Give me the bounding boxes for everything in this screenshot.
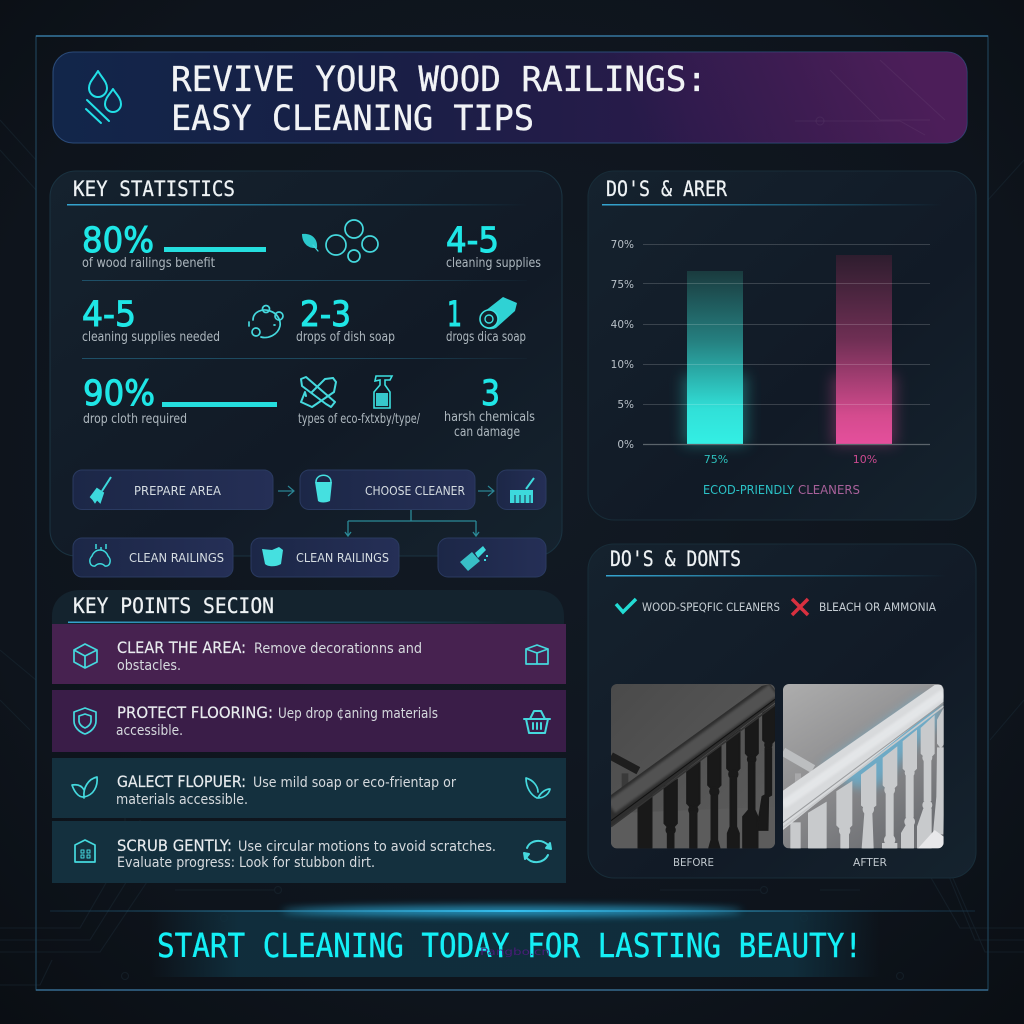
call to action: START CLEANING TODAY FOR LASTING BEAUTY! <box>157 926 862 965</box>
icon: cube <box>74 644 97 668</box>
icon: shield <box>74 708 96 734</box>
step: clean railings 1 <box>73 538 233 577</box>
label: before: BEFORE <box>673 856 714 869</box>
row: select flower: Use mild soap or eco-frientap or <box>253 775 456 791</box>
step: brush <box>497 470 546 510</box>
photo: before <box>611 684 775 848</box>
connector arrows <box>345 510 479 536</box>
bar chart: 10% <box>611 359 634 371</box>
row: select flower <box>52 758 566 818</box>
stat: 4-5 cleaning supplies: 4-5 <box>446 221 499 261</box>
stat: 4-5 supplies needed <box>82 295 220 345</box>
bar chart: 75% <box>611 279 634 291</box>
icon: box <box>526 645 548 664</box>
chart caption: ECOD-PRIENDLY <box>703 482 794 497</box>
icon: water drops <box>86 71 121 123</box>
icon: crossed tools <box>301 377 336 407</box>
panel: do's and don'ts <box>588 544 976 878</box>
stat: 3 harsh chemicals: 3 <box>481 374 500 414</box>
heading: key statistics: KEY STATISTICS <box>73 177 235 201</box>
bar chart <box>611 239 930 466</box>
icon: soap bubbles <box>249 306 283 338</box>
text: do: WOOD-SPEQFIC CLEANERS <box>642 600 780 614</box>
row: clear the area: obstacles. <box>117 658 181 674</box>
row: protect flooring: Uep drop ¢aning materials <box>278 706 438 722</box>
arrow <box>278 486 294 496</box>
row: select flower: materials accessible. <box>116 792 248 808</box>
row: clear the area <box>52 624 566 684</box>
stat: 2-3 drops: drops of dish soap <box>296 330 395 345</box>
arrow <box>478 486 494 496</box>
icon: check <box>616 599 636 612</box>
stat: 80%: of wood railings benefit <box>82 256 215 271</box>
stat: 90%: drop cloth required <box>83 412 187 427</box>
icon: cloth roll <box>480 297 517 329</box>
row: scrub gently: Evaluate progress: Look for stubbon dirt. <box>117 855 375 871</box>
step: prepare area: PREPARE AREA <box>134 483 221 498</box>
stat: 3 harsh chemicals: harsh chemicals <box>444 410 535 425</box>
step: prepare area <box>73 470 273 510</box>
title: REVIVE YOUR WOOD RAILINGS: <box>171 60 707 100</box>
icon: cross <box>792 599 808 615</box>
heading: chart: DO'S & ARER <box>606 177 727 201</box>
bar chart: 70% <box>611 239 634 251</box>
footer banner <box>50 906 975 977</box>
title: EASY CLEANING TIPS <box>171 99 534 139</box>
label: after: AFTER <box>853 856 887 869</box>
row: clear the area: CLEAR THE AREA: <box>117 638 246 657</box>
row: scrub gently <box>52 821 566 883</box>
text: don't: BLEACH OR AMMONIA <box>819 600 936 614</box>
step: clean railings 1: CLEAN RAILINGS <box>129 550 224 565</box>
heading: do's and don'ts: DO'S & DONTS <box>610 547 741 571</box>
caption: types of eco: types of eco-fxtxby/type/ <box>298 412 420 427</box>
bar chart: 10% <box>853 453 877 466</box>
stat: 2-3 drops <box>296 295 395 345</box>
stat: 1 with cloth roll: 1 <box>447 295 462 335</box>
icon: spray bottle <box>374 376 392 408</box>
stat: 90% <box>83 374 277 427</box>
step: scrub brush <box>438 538 546 577</box>
watermark text: Pangbo.cn <box>480 947 550 958</box>
row: select flower: GALECT FLOPUER: <box>117 772 246 791</box>
row: scrub gently: SCRUB GENTLY: <box>117 836 232 855</box>
stat: 80%: 80% <box>82 221 154 261</box>
bar chart: 5% <box>617 399 634 411</box>
photo: after <box>783 684 944 848</box>
stat: 1 with cloth roll: drogs dica soap <box>446 330 526 345</box>
stat: 80% <box>82 221 266 271</box>
icon: leaves left <box>72 777 97 798</box>
icon: house tag <box>75 840 95 862</box>
bar chart: 40% <box>611 319 634 331</box>
row: clear the area: Remove decorationns and <box>254 641 422 657</box>
row: scrub gently: Use circular motions to avoid scratches. <box>238 839 496 855</box>
flowchart <box>73 470 546 577</box>
icon: basket <box>524 711 550 733</box>
chart caption <box>703 482 860 497</box>
stat: 1 with cloth roll <box>446 295 526 345</box>
step: clean railings 2 <box>251 538 399 577</box>
title <box>171 60 707 139</box>
chart caption: CLEANERS <box>798 482 860 497</box>
stat: 2-3 drops: 2-3 <box>300 295 351 335</box>
row: protect flooring: accessible. <box>116 723 183 739</box>
step: choose cleaner <box>300 470 475 510</box>
stat: 4-5 supplies needed: 4-5 <box>82 295 136 335</box>
step: choose cleaner: CHOOSE CLEANER <box>365 483 465 498</box>
heading: key points: KEY POINTS SECION <box>73 594 274 618</box>
stat: 4-5 cleaning supplies: cleaning supplies <box>446 256 541 271</box>
panel: key statistics <box>50 171 562 556</box>
row: protect flooring <box>52 690 566 752</box>
stat: 4-5 cleaning supplies <box>446 221 541 271</box>
stat: 3 harsh chemicals: can damage <box>454 425 520 440</box>
bar chart: 75% <box>704 453 728 466</box>
stat: 90%: 90% <box>83 374 155 414</box>
panel: bar chart <box>588 171 976 520</box>
icon: leaves right <box>526 778 550 798</box>
panel: key points <box>52 590 566 883</box>
icon: refresh <box>524 841 551 862</box>
header banner <box>53 52 967 143</box>
stat: 4-5 supplies needed: cleaning supplies needed <box>82 330 220 345</box>
icon: leaf and bubbles <box>302 220 378 262</box>
stat: 3 harsh chemicals <box>444 374 535 440</box>
step: clean railings 2: CLEAN RAILINGS <box>296 550 389 565</box>
bar chart: 0% <box>617 439 634 451</box>
row: protect flooring: PROTECT FLOORING: <box>117 703 273 722</box>
